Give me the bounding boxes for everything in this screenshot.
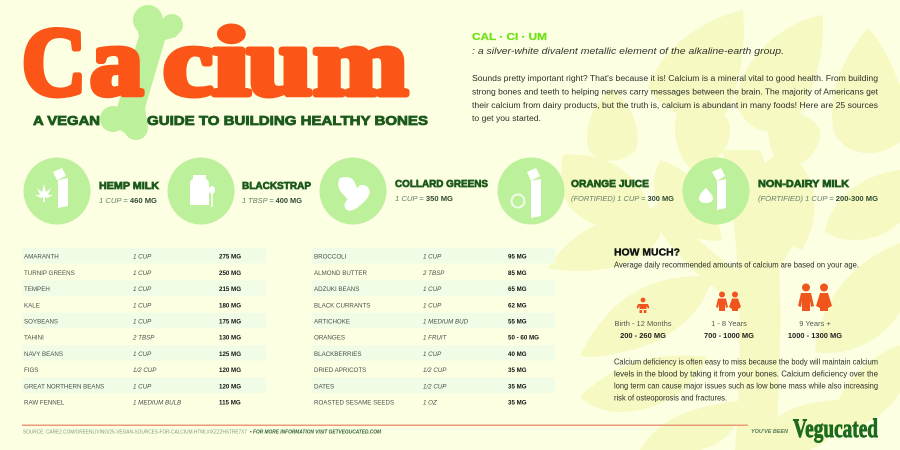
table: right column of foods: ROASTED SESAME SEEDS	[314, 400, 394, 406]
table: left column of foods: 180 MG	[219, 302, 241, 309]
source line	[23, 430, 382, 436]
top source: blackstrap: BLACKSTRAP	[242, 181, 311, 192]
table: right column of foods: 50 - 60 MG	[508, 335, 539, 342]
title: Calcium: a	[90, 8, 143, 116]
table: left column of foods: 115 MG	[219, 400, 241, 406]
title: Calcium: u	[247, 8, 312, 116]
footer rule	[22, 424, 748, 426]
panel: how much	[614, 246, 879, 402]
top source: hemp milk: 1 CUP = 460 MG	[99, 196, 157, 205]
table: left column of foods: 1 CUP	[133, 318, 152, 326]
table: left column of foods: 1 CUP	[133, 254, 152, 261]
icon: collard leaves	[338, 177, 370, 211]
table: left column of foods: 1 CUP	[133, 286, 152, 293]
top source: collard greens: COLLARD GREENS	[395, 179, 488, 190]
table: left column of foods: 1 CUP	[133, 351, 152, 358]
table: left column of foods: AMARANTH	[24, 254, 59, 261]
table: left column of foods: TEMPEH	[24, 286, 50, 293]
table: right column of foods: 1 CUP	[423, 302, 442, 309]
deficiency paragraph: levels in the blood by taking it from your bones. Calcium deficiency over the	[614, 370, 879, 378]
age group: 9 years and over: 9 Years +	[799, 319, 831, 328]
top source: blackstrap	[168, 158, 311, 224]
table: right column of foods: 1 CUP	[423, 351, 442, 358]
table: right column of foods: 40 MG	[508, 351, 527, 358]
table: right column of foods: 1 CUP	[423, 254, 442, 261]
table: right column of foods: 1/2 CUP	[423, 367, 447, 374]
table: left column of foods: 1 CUP	[133, 270, 152, 277]
table: left column of foods: KALE	[24, 302, 40, 309]
intro paragraph: to get you started.	[472, 114, 541, 123]
table: right column of foods: DATES	[314, 383, 334, 390]
table: right column of foods: BLACKBERRIES	[314, 351, 361, 358]
table: left column of foods: 120 MG	[219, 383, 241, 390]
table: right column of foods: 1/2 CUP	[423, 383, 447, 390]
definition block: : a silver-white divalent metallic element of the alkaline-earth group.	[472, 46, 784, 57]
table: right column of foods: 55 MG	[508, 318, 527, 326]
age group: birth to 12 months	[614, 319, 672, 340]
table: right column of foods: 62 MG	[508, 302, 527, 309]
source line: • FOR MORE INFORMATION VISIT GETVEGUCATED.COM	[250, 430, 382, 436]
deficiency paragraph	[614, 358, 879, 402]
icon: baby	[636, 298, 650, 313]
table: right column of foods: 2 TBSP	[422, 270, 445, 277]
top source: blackstrap: 1 TBSP = 400 MG	[242, 196, 302, 205]
deficiency paragraph: risk of osteoporosis and fractures.	[614, 394, 727, 402]
table: right column of foods: ARTICHOKE	[314, 318, 350, 326]
table: left column of foods: 120 MG	[219, 367, 241, 374]
age group: 1 to 8 years: 1 - 8 Years	[711, 319, 747, 328]
table: left column of foods: GREAT NORTHERN BEANS	[24, 383, 104, 390]
definition block: CAL · CI · UM	[472, 31, 547, 43]
table: left column of foods: 1 MEDIUM BULB	[133, 400, 181, 406]
panel: how much: HOW MUCH?	[614, 246, 680, 258]
bone illustration	[100, 5, 183, 140]
table: right column of foods: 1 CUP	[423, 286, 442, 293]
top source: collard greens	[320, 158, 488, 224]
icon: carton with hemp leaf	[35, 168, 68, 208]
table: right column of foods	[312, 248, 555, 406]
subtitle: A VEGAN	[33, 113, 100, 128]
age group: 1 to 8 years: 700 - 1000 MG	[704, 331, 754, 340]
credit: you've been Vegucated	[751, 414, 878, 443]
table: left column of foods: SOYBEANS	[24, 318, 58, 326]
top source: non-dairy milk: (FORTIFIED) 1 CUP = 200-300 MG	[758, 194, 878, 203]
table: left column of foods: 275 MG	[219, 254, 241, 261]
icon: adults	[798, 284, 832, 311]
table: left column of foods: 250 MG	[219, 270, 241, 277]
age group: birth to 12 months: Birth - 12 Months	[614, 319, 672, 328]
table: right column of foods: BROCCOLI	[314, 254, 347, 261]
top source: non-dairy milk: NON-DAIRY MILK	[758, 179, 850, 190]
age group: 9 years and over: 1000 - 1300 MG	[788, 331, 842, 340]
age group: birth to 12 months: 200 - 260 MG	[620, 331, 666, 340]
subtitle: GUIDE TO BUILDING HEALTHY BONES	[147, 113, 428, 128]
table: left column of foods: 2 TBSP	[132, 335, 155, 342]
intro paragraph	[472, 74, 879, 123]
table: right column of foods: 65 MG	[508, 286, 527, 293]
table: right column of foods: 1 FRUIT	[423, 335, 448, 342]
definition block	[472, 31, 784, 57]
table: right column of foods: 85 MG	[508, 270, 527, 277]
table: right column of foods: ORANGES	[314, 335, 345, 342]
table: left column of foods: FIGS	[24, 367, 38, 374]
title: Calcium: i	[212, 8, 250, 116]
top source: orange juice: ORANGE JUICE	[571, 179, 649, 190]
table: right column of foods: ADZUKI BEANS	[314, 286, 359, 293]
table: right column of foods: 1 MEDIUM BUD	[423, 318, 469, 326]
table: right column of foods: 35 MG	[508, 367, 527, 374]
top source: orange juice	[498, 158, 674, 224]
intro paragraph: Sounds pretty important right? That's because it is! Calcium is a mineral vital to good health. From building	[472, 74, 878, 83]
top source: hemp milk	[24, 158, 160, 224]
table: right column of foods: 35 MG	[508, 383, 527, 390]
top source: collard greens: 1 CUP = 350 MG	[395, 194, 453, 203]
background: tree with leaves	[548, 10, 900, 450]
intro paragraph: their calcium from dairy products, but the truth is, calcium is abundant in many foods! Here are 25 sources	[472, 101, 878, 110]
icon: children	[716, 292, 741, 311]
table: left column of foods: 1 CUP	[133, 302, 152, 309]
title: Calcium: m	[313, 8, 408, 116]
title: Calcium	[22, 8, 408, 116]
credit: you've been Vegucated: YOU'VE BEEN	[751, 429, 788, 435]
table: right column of foods: 1 OZ	[423, 400, 437, 406]
table: right column of foods: BLACK CURRANTS	[314, 302, 370, 309]
icon: carton with orange slice	[512, 168, 541, 218]
icon: jar and spoon	[190, 175, 215, 207]
table: left column of foods: NAVY BEANS	[24, 351, 63, 358]
top source: hemp milk: HEMP MILK	[99, 181, 160, 192]
table: left column of foods: TAHINI	[24, 335, 44, 342]
age group: 1 to 8 years	[704, 319, 754, 340]
table: left column of foods: 130 MG	[219, 335, 241, 342]
table: right column of foods: ALMOND BUTTER	[314, 270, 367, 277]
table: left column of foods: 215 MG	[219, 286, 241, 293]
source line: SOURCE: CARE2.COM/GREENLIVING/25-VEGAN-SOURCES-FOR-CALCIUM.HTML#IXZZ2HSTRE7X7	[23, 430, 247, 436]
table: right column of foods: 35 MG	[508, 400, 527, 406]
table: right column of foods: DRIED APRICOTS	[314, 367, 366, 374]
title: Calcium: C	[22, 8, 86, 116]
deficiency paragraph: Calcium deficiency is often easy to miss because the body will maintain calcium	[614, 358, 878, 366]
deficiency paragraph: long term can cause major issues such as low bone mass while also increasing	[614, 382, 878, 390]
table: left column of foods: TURNIP GREENS	[24, 270, 75, 277]
table: left column of foods	[22, 248, 266, 406]
icon: carton with almond	[699, 168, 726, 210]
table: right column of foods: 95 MG	[508, 254, 527, 261]
table: left column of foods: 175 MG	[219, 318, 241, 326]
subtitle	[33, 113, 428, 128]
title: Calcium: c	[163, 8, 213, 116]
age group: 9 years and over	[788, 319, 842, 340]
table: left column of foods: RAW FENNEL	[24, 400, 65, 406]
panel: how much: Average daily recommended amounts of calcium are based on your age.	[614, 260, 859, 270]
table: left column of foods: 1 CUP	[133, 383, 152, 390]
top source: non-dairy milk	[682, 158, 878, 224]
table: left column of foods: 125 MG	[219, 351, 241, 358]
intro paragraph: strong bones and teeth to helping nerves carry messages between the brain. The majority of Americans get	[472, 88, 879, 96]
table: left column of foods: 1/2 CUP	[133, 367, 157, 374]
top source: orange juice: (FORTIFIED) 1 CUP = 300 MG	[571, 194, 674, 203]
